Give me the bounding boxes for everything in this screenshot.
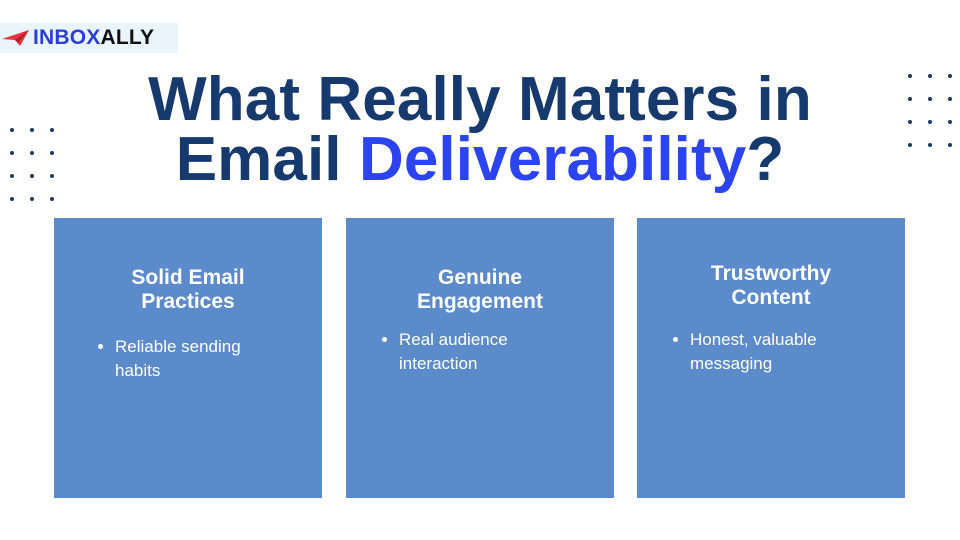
decorative dots right (908, 74, 952, 147)
heading: Genuine (438, 266, 522, 289)
bullet: Real audience interaction (399, 330, 508, 373)
logo (0, 23, 178, 53)
panel: trustworthy content (637, 218, 905, 498)
title (148, 65, 812, 194)
panel: solid email practices (54, 218, 322, 498)
bullet: Reliable sending habits (115, 337, 241, 380)
panel: genuine engagement (346, 218, 614, 498)
heading: Trustworthy (711, 262, 831, 285)
heading: Practices (141, 290, 235, 313)
heading (711, 262, 831, 309)
heading (131, 266, 245, 313)
title: Email Deliverability? (176, 125, 784, 194)
bullet: Honest, valuable messaging (690, 330, 817, 373)
heading: Engagement (417, 290, 543, 313)
title: What Really Matters in (148, 65, 812, 134)
heading: Solid Email (131, 266, 245, 289)
decorative dots left (10, 128, 54, 201)
icon: paper plane (2, 30, 29, 46)
logo text: INBOXALLY (33, 26, 154, 49)
heading (417, 266, 543, 313)
heading: Content (731, 286, 811, 309)
